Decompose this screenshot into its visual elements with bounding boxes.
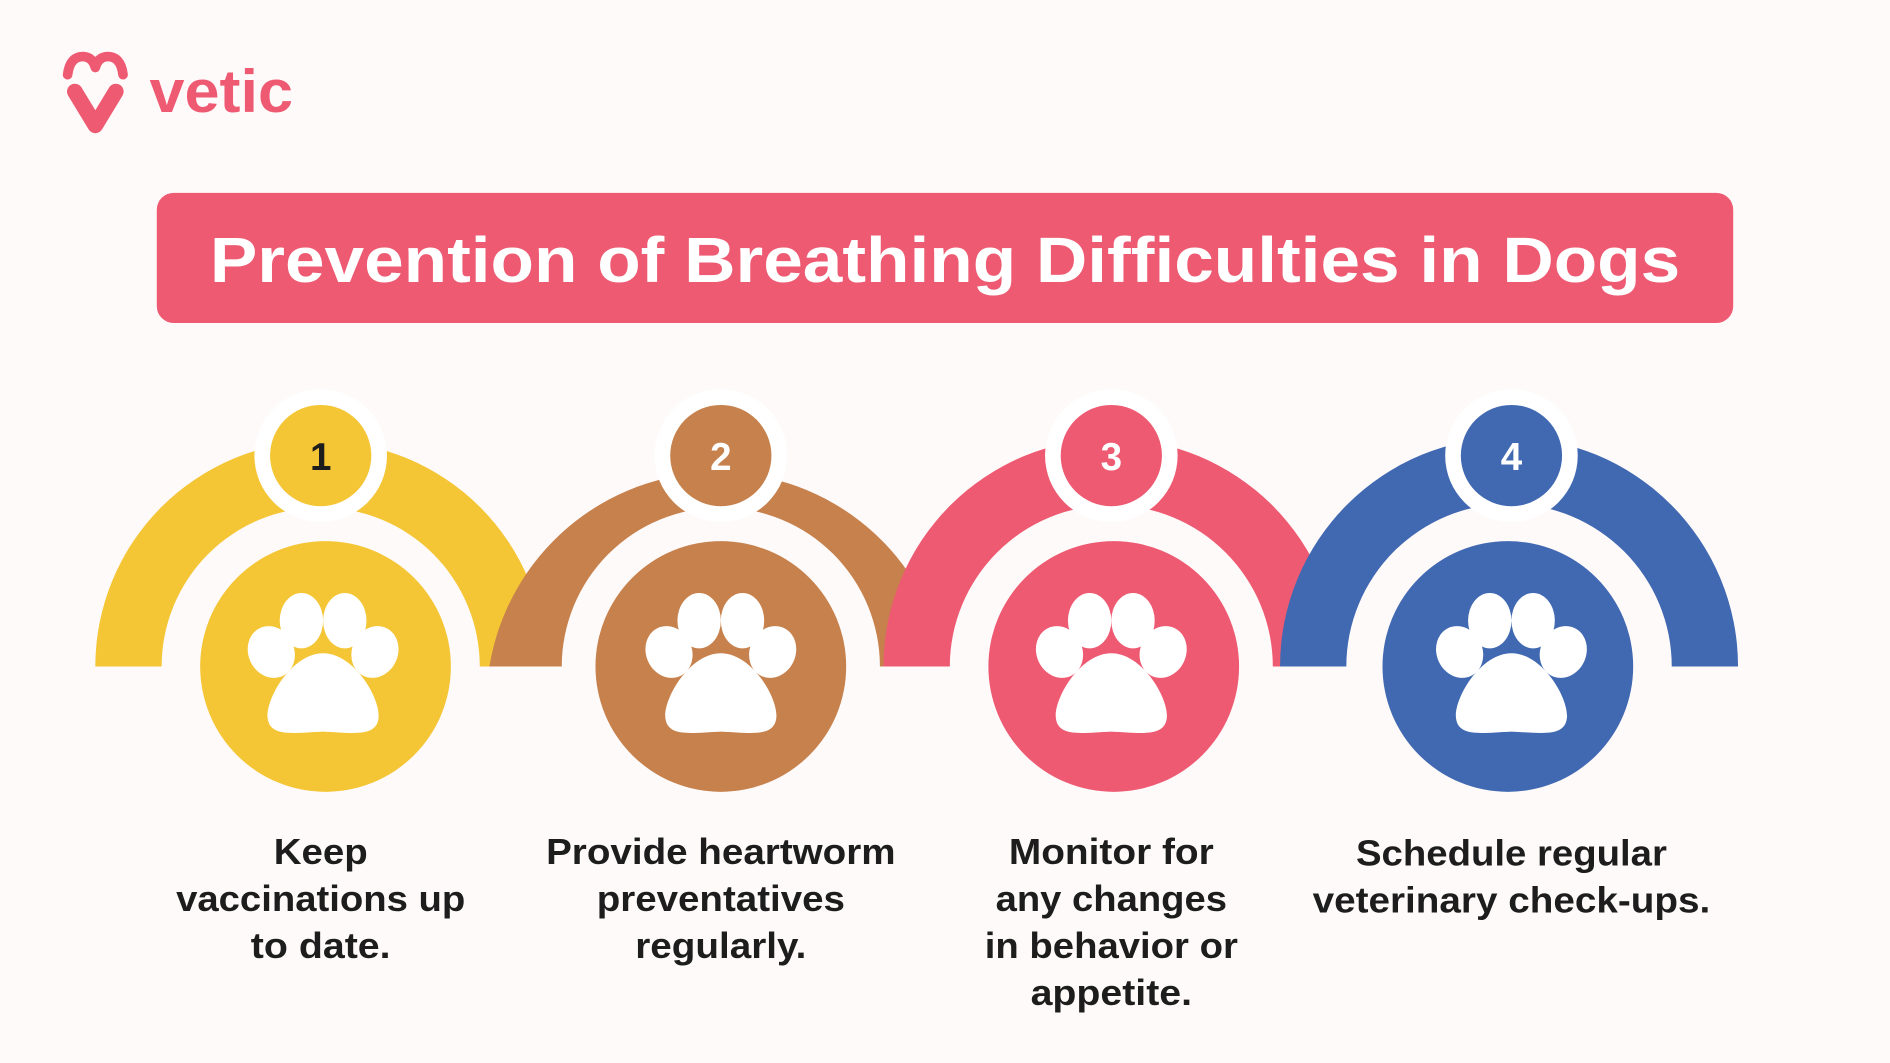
step 3: appetite. [1031, 972, 1192, 1013]
step 2: regularly. [635, 925, 806, 966]
step 3 [884, 389, 1339, 1013]
step 3: in behavior or [985, 925, 1238, 966]
step 4: Schedule regular [1356, 832, 1667, 873]
step 4 [1280, 389, 1738, 920]
step 4: veterinary check-ups. [1313, 879, 1710, 920]
step 1: vaccinations up [176, 878, 465, 919]
step 1: 1 [310, 436, 331, 479]
logo [68, 57, 293, 125]
step 2 [489, 389, 946, 966]
step 2: Provide heartworm [546, 831, 896, 872]
step 3: 3 [1101, 436, 1122, 479]
logo text: vetic [150, 57, 293, 125]
step 2: preventatives [597, 878, 845, 919]
step 2: 2 [710, 436, 732, 479]
step 3: Monitor for [1009, 831, 1214, 872]
step 1 [95, 389, 546, 966]
step 1: to date. [251, 925, 391, 966]
icon: heart logo [68, 57, 123, 125]
title banner [157, 193, 1733, 323]
step 1: Keep [274, 831, 368, 872]
title banner: Prevention of Breathing Difficulties in Dogs [210, 224, 1680, 296]
step 3: any changes [996, 878, 1227, 919]
step 4: 4 [1501, 436, 1523, 479]
